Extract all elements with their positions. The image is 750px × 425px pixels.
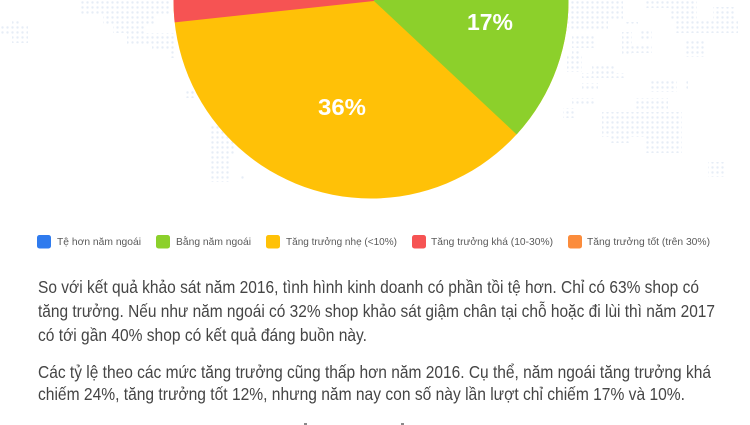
legend text: Bằng năm ngoái: Bằng năm ngoái <box>176 235 251 248</box>
slice: tăng trưởng khá <box>174 0 374 22</box>
label 36%: 36% <box>318 94 366 120</box>
world map dot background <box>0 0 738 182</box>
slice: tăng trưởng nhẹ <box>170 0 572 200</box>
clipped diacritic marks of the next line <box>304 423 404 425</box>
pie chart <box>174 0 568 198</box>
legend swatch: red <box>412 235 426 248</box>
paragraph 1: có tới gần 40% shop có kết quả đáng buồn này. <box>38 325 367 345</box>
paragraph 1 <box>38 277 715 345</box>
legend text: Tệ hơn năm ngoái: Tệ hơn năm ngoái <box>57 236 141 248</box>
label 17%: 17% <box>467 9 513 35</box>
legend swatch: yellow <box>266 235 280 248</box>
legend <box>37 235 710 248</box>
legend text: Tăng trưởng tốt: Tăng trưởng tốt (trên 30%) <box>587 236 710 248</box>
legend swatch: orange <box>568 235 582 248</box>
legend swatch: green <box>156 235 170 248</box>
legend swatch: blue <box>37 235 51 248</box>
slice: bằng năm ngoái <box>374 0 568 134</box>
legend text: Tăng trưởng khá: Tăng trưởng khá (10-30%) <box>431 236 553 248</box>
paragraph 2 <box>38 362 711 404</box>
paragraph 2: chiếm 24%, tăng trưởng tốt 12%, nhưng năm nay con số này lần lượt chỉ chiếm 17% và 10%. <box>38 384 685 404</box>
legend text: Tăng trưởng nhẹ: Tăng trưởng nhẹ (<10%) <box>286 236 397 248</box>
